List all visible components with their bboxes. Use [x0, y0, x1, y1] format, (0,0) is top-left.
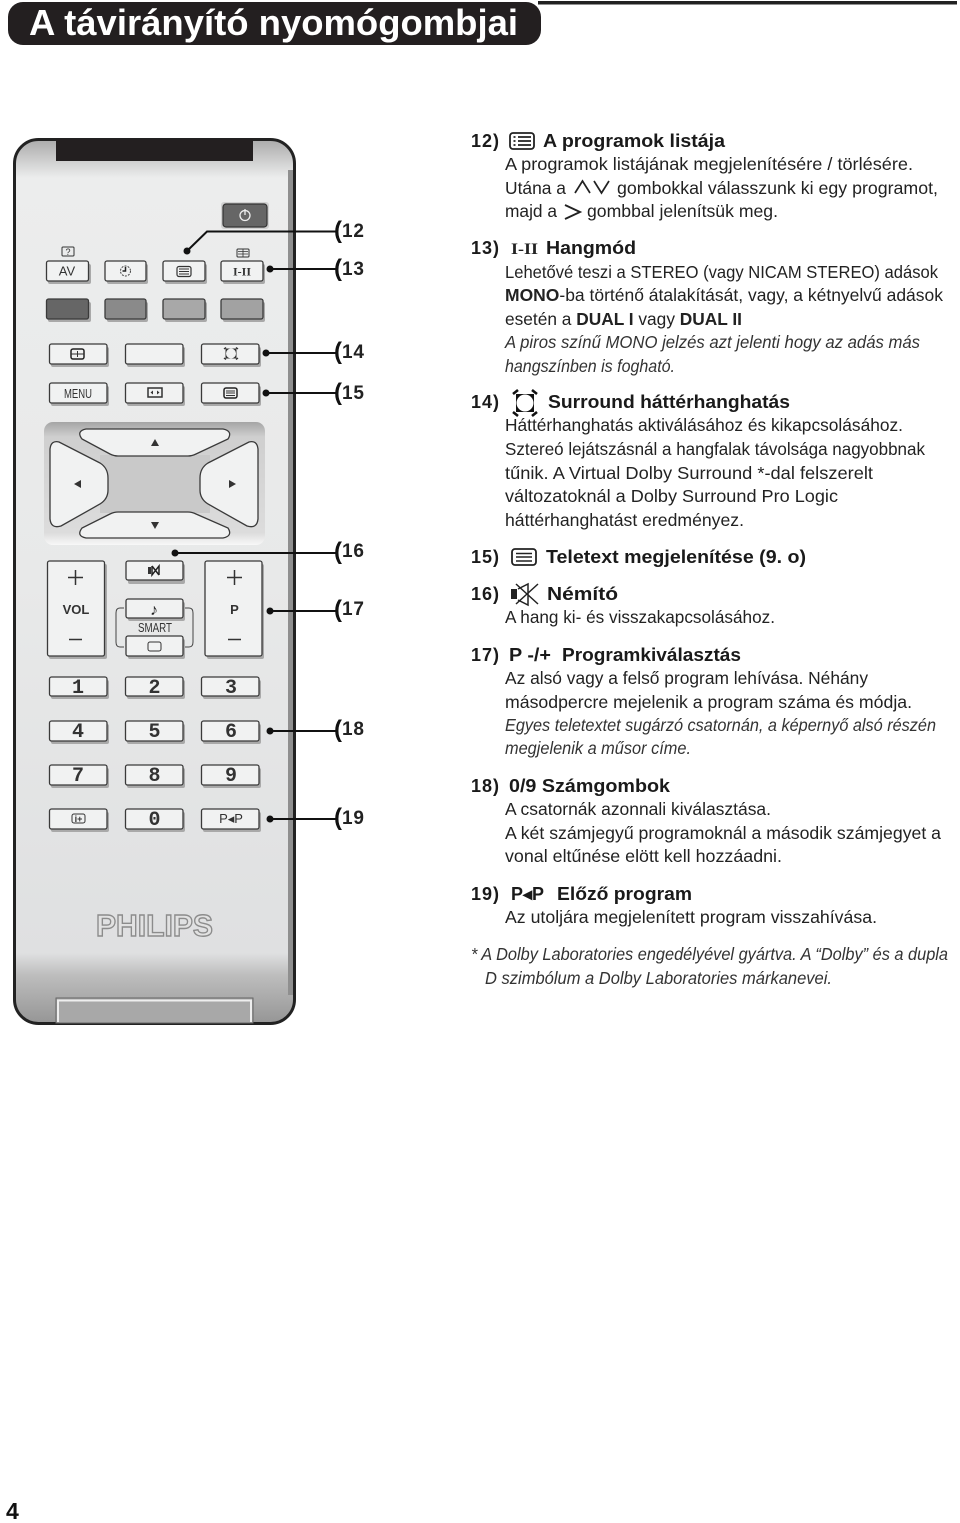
callout 17: 17	[342, 599, 364, 620]
item 13: sound mode: esetén a DUAL I vagy DUAL II	[505, 309, 742, 329]
callout 13: 13	[342, 259, 364, 280]
item 13: sound mode	[471, 238, 943, 376]
item 19: previous programme: Előző program	[557, 884, 692, 904]
number keys: 3	[225, 677, 237, 700]
number keys	[50, 677, 261, 788]
up button	[80, 429, 230, 456]
icon: surround	[513, 390, 537, 416]
number keys: 5	[148, 721, 161, 744]
callout 19	[266, 804, 364, 831]
callout 12: (	[334, 217, 342, 244]
navigation pad	[44, 422, 265, 545]
icon: list	[510, 133, 534, 149]
item 13: sound mode: hangszínben is fogható.	[505, 356, 675, 376]
volume rocker	[48, 561, 107, 659]
footnote	[471, 944, 948, 988]
info button: i+	[75, 814, 82, 824]
number keys: 7	[72, 765, 84, 788]
colour buttons	[46, 299, 265, 322]
item 17: programme selection: Programkiválasztás	[562, 645, 741, 665]
item 13: sound mode: Hangmód	[546, 238, 636, 258]
right button	[200, 442, 258, 527]
item 12: programme list: majd a	[505, 201, 557, 221]
callout 14: 14	[342, 342, 364, 363]
number keys: 4	[72, 721, 84, 744]
item 14: surround: Sztereó lejátszásnál a hangfalak távolsága nagyobbnak	[505, 439, 925, 459]
item 18: number keys: 18)	[471, 776, 499, 796]
item 19: previous programme: P◂P	[511, 884, 544, 904]
callout 12	[184, 217, 364, 254]
number keys: 6	[225, 721, 237, 744]
item 14: surround: Surround háttérhanghatás	[548, 392, 790, 412]
number keys: 9	[225, 765, 237, 788]
item 14: surround: változatoknál a Dolby Surround Pro Logic	[505, 486, 838, 506]
callout 12: 12	[342, 221, 364, 242]
zero key	[126, 809, 185, 832]
item 19: previous programme: Az utoljára megjelenített program visszahívása.	[505, 907, 877, 927]
callout 15: 15	[342, 383, 364, 404]
teletext button	[202, 383, 261, 406]
item 13: sound mode: MONO-ba történő átalakítását, vagy, a kétnyelvű adások	[505, 285, 943, 305]
callout 13: (	[334, 255, 342, 282]
AV button	[46, 261, 91, 284]
infrared window	[56, 139, 253, 161]
smart sound button	[126, 599, 185, 621]
number keys: 8	[148, 765, 161, 788]
item 18: number keys: A két számjegyű programoknál a második számjegyet a	[505, 823, 941, 843]
info button	[50, 809, 109, 832]
callout 18	[266, 716, 364, 743]
timer button	[105, 261, 148, 284]
callout 18: 18	[342, 719, 364, 740]
item 14: surround: Háttérhanghatás aktiválásához és kikapcsolásához.	[505, 415, 903, 435]
icon: I-II: I-II	[511, 241, 538, 258]
footnote: D szimbólum a Dolby Laboratories márkanevei.	[485, 968, 832, 988]
power button	[221, 202, 269, 229]
programme list button	[163, 261, 207, 284]
item 17: programme selection: 17)	[471, 645, 499, 665]
item 18: number keys: vonal eltűnése elött kell hozzáadni.	[505, 846, 782, 866]
programme rocker	[205, 561, 264, 659]
guide icon	[237, 249, 249, 257]
item 17: programme selection: másodpercre mejelenik a program száma és módja.	[505, 692, 912, 712]
help icon: ?	[65, 247, 71, 257]
title banner: A távirányító nyomógombjai	[29, 2, 518, 43]
item 12: programme list	[471, 131, 938, 221]
volume rocker: VOL	[63, 602, 89, 617]
menu button	[50, 383, 109, 406]
callout 17: (	[334, 596, 342, 623]
callout 19: (	[334, 804, 342, 831]
wide screen button	[126, 383, 185, 406]
icon: right arrow	[565, 205, 580, 219]
item 12: programme list: A programok listájának megjelenítésére / törlésére.	[505, 154, 913, 174]
item 14: surround: tűnik. A Virtual Dolby Surround *-dal felszerelt	[505, 463, 873, 483]
mute button	[126, 561, 185, 584]
previous programme button	[202, 809, 261, 832]
item 15: teletext: 15)	[471, 547, 499, 567]
item 19: previous programme: 19)	[471, 884, 499, 904]
item 16: mute	[471, 584, 775, 627]
item 14: surround: 14)	[471, 392, 499, 412]
callout 19: 19	[342, 808, 364, 829]
icon: teletext	[512, 549, 536, 565]
top rule	[538, 1, 957, 4]
smart label: SMART	[138, 620, 172, 635]
item 12: programme list: gombbal jelenítsük meg.	[587, 201, 778, 221]
callout 13	[266, 255, 364, 282]
brand logo: PHILIPS	[96, 908, 213, 943]
item 18: number keys: 0/9 Számgombok	[509, 776, 671, 796]
item 18: number keys: A csatornák azonnali kiválasztása.	[505, 799, 771, 819]
item 16: mute: 16)	[471, 584, 499, 604]
item 12: programme list: A programok listája	[543, 131, 726, 151]
item 17: programme selection: Az alsó vagy a felső program lehívása. Néhány	[505, 668, 868, 688]
item 14: surround: háttérhanghatást eredményez.	[505, 510, 744, 530]
callout 17	[266, 596, 364, 623]
item 16: mute: A hang ki- és visszakapcsolásához.	[505, 607, 775, 627]
item 15: teletext: Teletext megjelenítése (9. o)	[546, 547, 806, 567]
callout 18: (	[334, 716, 342, 743]
callout 14	[262, 338, 364, 365]
callout 16	[172, 538, 364, 565]
smart picture button	[126, 636, 185, 659]
item 12: programme list: 12)	[471, 131, 499, 151]
number keys: 1	[72, 677, 84, 700]
item 12: programme list: gombokkal válasszunk ki egy programot,	[617, 178, 938, 198]
remote control	[14, 139, 294, 1024]
number keys: 2	[148, 677, 161, 700]
sound mode button	[221, 261, 265, 284]
smart bracket	[116, 608, 193, 647]
programme rocker: P	[230, 602, 239, 617]
smart sound button: ♪	[150, 602, 158, 619]
menu button: MENU	[64, 386, 92, 401]
zero key: 0	[148, 809, 161, 832]
item 19: previous programme	[471, 884, 877, 927]
blank button	[126, 344, 185, 367]
AV button: AV	[59, 264, 76, 278]
item 12: programme list: Utána a	[505, 178, 566, 198]
previous programme button: P◂P	[219, 811, 243, 826]
item 13: sound mode: A piros színű MONO jelzés azt jelenti hogy az adás más	[504, 332, 920, 352]
item 16: mute: Némító	[547, 584, 618, 604]
left button	[50, 442, 108, 527]
item 13: sound mode: 13)	[471, 238, 499, 258]
item 14: surround	[471, 390, 925, 530]
battery slot	[56, 998, 253, 1023]
item 13: sound mode: Lehetővé teszi a STEREO (vagy NICAM STEREO) adások	[505, 262, 938, 282]
item 17: programme selection: P -/+	[509, 645, 551, 665]
sound mode button: I-II	[233, 264, 251, 278]
item 17: programme selection	[471, 645, 936, 758]
format button	[50, 344, 109, 367]
callout 16: (	[334, 538, 342, 565]
callout 15	[262, 379, 364, 406]
remote body	[14, 140, 294, 1024]
surround button	[202, 344, 261, 367]
item 18: number keys	[471, 776, 941, 866]
help icon	[62, 247, 74, 257]
callout 16: 16	[342, 541, 364, 562]
callout 14: (	[334, 338, 342, 365]
item 17: programme selection: megjelenik a műsor címe.	[505, 738, 691, 758]
icon: up and down arrows	[575, 181, 609, 193]
item 17: programme selection: Egyes teletextet sugárzó csatornán, a képernyő alsó részén	[505, 715, 936, 735]
callout 15: (	[334, 379, 342, 406]
icon: mute	[511, 584, 538, 605]
down button	[80, 512, 230, 538]
